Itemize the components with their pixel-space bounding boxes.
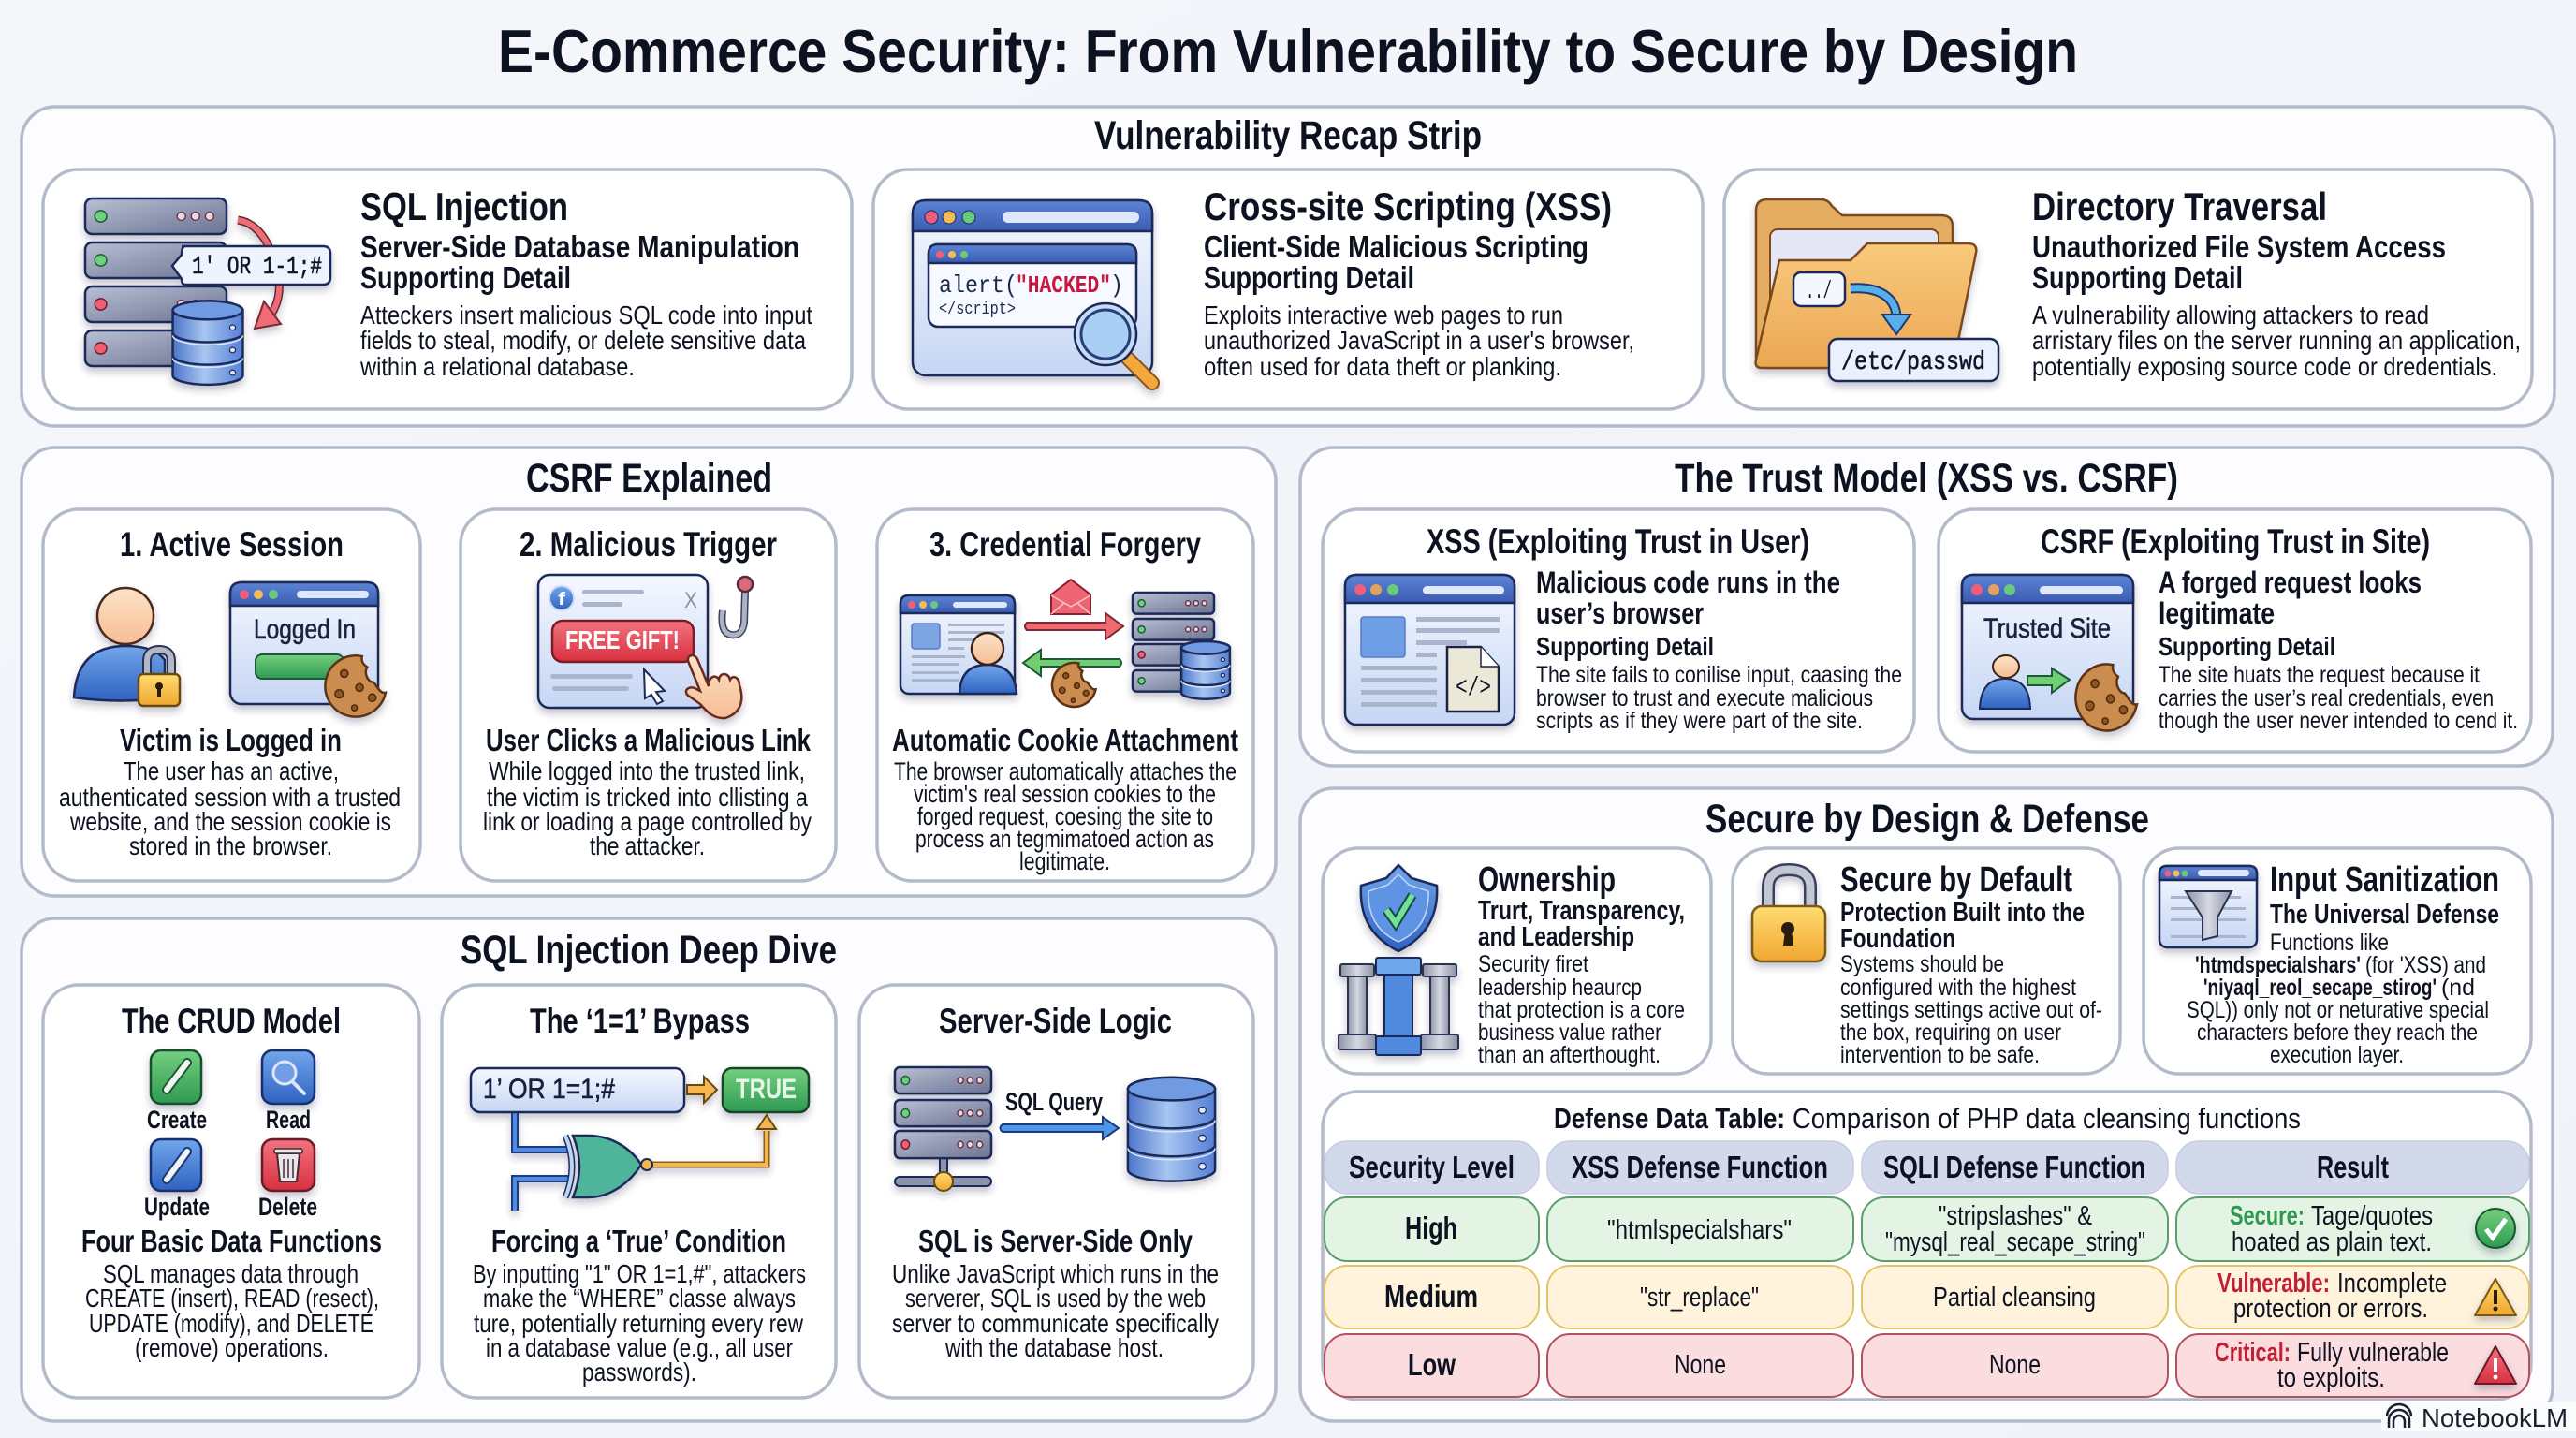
table row: high: "stripslashes" & — [1939, 1201, 2092, 1231]
icon: fishing hook — [722, 577, 753, 635]
panel: vulnerability recap strip — [22, 107, 2554, 426]
arrow: forged request with envelope — [1025, 580, 1123, 639]
text block: characters before they reach the — [2197, 1020, 2478, 1046]
label: update: Update — [144, 1193, 210, 1221]
text block — [1478, 860, 1685, 1068]
text block: Atteckers insert malicious SQL code into input — [360, 301, 812, 330]
table row: high: High — [1405, 1211, 1457, 1245]
text block: 'htmdspecialshars' — [2195, 952, 2361, 978]
heading: The ‘1=1’ Bypass — [530, 1002, 750, 1040]
heading: secure by design: Secure by Design & Defense — [1705, 797, 2149, 842]
subheading and description — [892, 1224, 1219, 1362]
arrow: SQL query: SQL Query — [1005, 1088, 1103, 1116]
arrow: returning cookie — [1023, 650, 1121, 707]
heading: trust model: The Trust Model (XSS vs. CSRF) — [1675, 456, 2178, 501]
icon: update — [151, 1139, 201, 1191]
text block — [1536, 565, 1902, 734]
table row: high — [1325, 1197, 2529, 1261]
text block: Directory Traversal — [2032, 184, 2327, 228]
table header row: Security Level — [1349, 1150, 1515, 1184]
icon: phishing popup with free gift button: X — [684, 588, 697, 613]
text block: configured with the highest — [1840, 975, 2076, 1001]
text block: SQL Injection — [360, 184, 568, 228]
table row: medium — [1325, 1266, 2529, 1328]
card: server-side logic — [859, 985, 1253, 1398]
table header row: SQLI Defense Function — [1883, 1150, 2145, 1184]
card: cross-site scripting — [873, 169, 1703, 409]
icon: browser alert with magnifier: alert( — [939, 271, 1017, 300]
text block: settings settings active out of- — [1840, 997, 2102, 1023]
icon: victim browser — [900, 595, 1017, 694]
heading: CSRF (Exploiting Trust in Site) — [2041, 522, 2430, 561]
label: delete: Delete — [258, 1193, 317, 1221]
subheading and description: (remove) operations. — [135, 1333, 329, 1362]
subheading and description: By inputting "1" OR 1=1,#", attackers — [473, 1259, 806, 1288]
subheading and description: in a database value (e.g., all user — [486, 1333, 793, 1362]
subheading and description: link or loading a page controlled by — [483, 807, 812, 836]
table row: medium: "str_replace" — [1640, 1283, 1759, 1313]
subheading and description: make the “WHERE” classe always — [483, 1284, 796, 1313]
text block: Systems should be — [1840, 951, 2004, 977]
icon: server stack with database and injected query: 1' OR 1-1;# — [192, 254, 322, 282]
icon: trusted site browser with cookie: Trusted Site — [1983, 613, 2111, 644]
heading: deep dive: SQL Injection Deep Dive — [461, 928, 837, 973]
subheading and description: ture, potentially returning every rew — [474, 1309, 804, 1338]
icon: padlock — [1752, 870, 1825, 961]
subheading and description: forged request, coesing the site to — [917, 802, 1213, 830]
subheading and description — [81, 1224, 382, 1362]
table row: low — [1325, 1334, 2529, 1397]
subheading and description — [473, 1224, 806, 1387]
text block: Malicious code runs in the — [1536, 565, 1840, 599]
text block: Supporting Detail — [1536, 632, 1714, 661]
icon: trusted site browser with cookie — [1962, 575, 2137, 730]
card: ownership — [1323, 848, 1711, 1074]
text block: carries the user’s real credentials, even — [2159, 685, 2494, 712]
text block: user’s browser — [1536, 596, 1704, 630]
text block: Functions like — [2270, 930, 2389, 956]
card: 1=1 bypass — [442, 985, 836, 1398]
subheading and description — [892, 723, 1238, 875]
table row: medium: Medium — [1384, 1279, 1478, 1313]
table row: medium: protection or errors. — [2233, 1294, 2428, 1324]
icon: networked server — [895, 1067, 991, 1191]
subheading and description: legitimate. — [1019, 847, 1110, 875]
icon: folder traversal — [1756, 199, 1998, 381]
heading: Server-Side Logic — [939, 1002, 1172, 1040]
table row: low: Fully vulnerable — [2297, 1338, 2449, 1368]
text block: within a relational database. — [359, 352, 635, 381]
subheading and description: The user has an active, — [124, 756, 339, 785]
icon: browser alert with magnifier: </script> — [939, 301, 1016, 319]
text block: (nd — [2441, 975, 2475, 1001]
text block: A forged request looks — [2159, 565, 2422, 599]
diagram: logic gate bypass: TRUE — [736, 1074, 797, 1105]
subheading and description: SQL manages data through — [103, 1259, 359, 1288]
subheading and description: the attacker. — [590, 831, 705, 860]
icon: delete — [262, 1139, 315, 1191]
card: XSS trust — [1323, 509, 1914, 752]
subheading and description: UPDATE (modify), and DELETE — [89, 1309, 373, 1338]
icon: green check — [2476, 1209, 2515, 1248]
text block: Protection Built into the — [1840, 898, 2085, 928]
table row: low: Low — [1408, 1347, 1456, 1382]
heading: 3. Credential Forgery — [929, 525, 1201, 564]
card: input sanitization — [2144, 848, 2531, 1074]
subheading and description: serverer, SQL is used by the web — [905, 1284, 1206, 1313]
text block: SQL)) only not or neturative special — [2187, 997, 2489, 1023]
text block: business value rather — [1478, 1020, 1661, 1046]
text block: Supporting Detail — [1204, 260, 1414, 295]
subheading and description: stored in the browser. — [129, 831, 332, 860]
text block: unauthorized JavaScript in a user's browser, — [1204, 326, 1634, 355]
table row: medium: Partial cleansing — [1933, 1283, 2096, 1313]
table row: low: None — [1989, 1350, 2041, 1380]
subheading and description: Forcing a ‘True’ Condition — [491, 1224, 786, 1258]
subheading and description: CREATE (insert), READ (resect), — [85, 1284, 379, 1313]
subheading and description: website, and the session cookie is — [69, 807, 391, 836]
text block: Trurt, Transparency, — [1478, 896, 1685, 926]
card: CRUD model — [43, 985, 419, 1398]
text block: execution layer. — [2270, 1042, 2404, 1068]
panel: SQL injection deep dive — [22, 918, 1276, 1421]
text block — [2159, 565, 2518, 734]
arrow: SQL query — [1000, 1088, 1119, 1139]
heading: The CRUD Model — [122, 1002, 341, 1040]
text block: and Leadership — [1478, 922, 1634, 952]
icon: browser alert with magnifier: "HACKED" — [1016, 271, 1111, 300]
watermark: NotebookLM: NotebookLM — [2422, 1403, 2568, 1432]
text block: Supporting Detail — [360, 260, 571, 295]
subheading and description: Unlike JavaScript which runs in the — [892, 1259, 1219, 1288]
icon: shield with check — [1361, 865, 1437, 951]
text block — [1840, 860, 2102, 1068]
card: directory traversal — [1724, 169, 2532, 409]
table row: high: "htmlspecialshars" — [1607, 1215, 1792, 1245]
text block: legitimate — [2159, 596, 2275, 630]
text block: Supporting Detail — [2159, 632, 2335, 661]
text block: that protection is a core — [1478, 997, 1685, 1023]
table title: Comparison of PHP data cleansing functions — [1793, 1102, 2301, 1135]
icon: browser with code document — [1345, 575, 1515, 725]
text block: (for 'XSS) and — [2365, 952, 2486, 978]
icon: phishing popup with free gift button — [538, 575, 741, 718]
text block: intervention to be safe. — [1840, 1042, 2040, 1068]
text block: Client-Side Malicious Scripting — [1204, 229, 1588, 264]
subheading and description: victim's real session cookies to the — [914, 780, 1216, 808]
icon: logged-in browser with cookie: Logged In — [254, 614, 356, 645]
table header row: Result — [2317, 1150, 2389, 1184]
text block: potentially exposing source code or dredentials. — [2032, 352, 2497, 381]
subheading and description: Automatic Cookie Attachment — [892, 723, 1238, 757]
card: defense data table — [1323, 1092, 2531, 1400]
table header row — [1325, 1141, 2529, 1194]
label: read: Read — [266, 1106, 311, 1134]
card: malicious trigger — [461, 509, 836, 881]
card: SQL injection — [43, 169, 852, 409]
text block: Secure by Default — [1840, 860, 2072, 900]
icon: warning triangle — [2475, 1279, 2516, 1315]
card: secure by default — [1733, 848, 2120, 1074]
icon: phishing popup with free gift button: f — [558, 590, 566, 609]
subheading and description: passwords). — [582, 1357, 696, 1387]
text block: than an afterthought. — [1478, 1042, 1661, 1068]
heading: recap strip: Vulnerability Recap Strip — [1094, 113, 1482, 158]
icon: pillars — [1339, 958, 1458, 1055]
subheading and description: authenticated session with a trusted — [59, 783, 401, 812]
text block: Server-Side Database Manipulation — [360, 229, 799, 264]
icon: danger triangle — [2475, 1346, 2516, 1384]
diagram: logic gate bypass: 1’ OR 1=1;# — [483, 1074, 615, 1105]
text block: Foundation — [1840, 924, 1955, 954]
table row: high: Secure: — [2230, 1201, 2305, 1231]
subheading and description: server to communicate specifically — [892, 1309, 1219, 1338]
card: credential forgery — [877, 509, 1253, 881]
icon: logged-in browser with cookie — [230, 582, 386, 717]
subheading and description — [483, 723, 812, 860]
icon: browser with funnel — [2159, 866, 2257, 947]
icon: user with padlock — [74, 588, 180, 706]
icon: folder traversal: ../ — [1806, 277, 1832, 305]
subheading and description — [59, 723, 401, 860]
text block: fields to steal, modify, or delete sensitive data — [360, 326, 806, 355]
text block: the box, requiring on user — [1840, 1020, 2061, 1046]
icon: folder traversal: /etc/passwd — [1841, 348, 1985, 377]
heading: 1. Active Session — [120, 525, 344, 564]
icon: server and database — [1133, 593, 1230, 699]
table row: medium: Incomplete — [2337, 1269, 2447, 1299]
icon: server stack with database and injected query — [85, 198, 330, 385]
text block: Exploits interactive web pages to run — [1204, 301, 1563, 330]
text block: The Universal Defense — [2270, 900, 2499, 930]
table row: high: Tage/quotes — [2311, 1201, 2433, 1231]
title: E-Commerce Security: From Vulnerability to Secure by Design — [498, 17, 2078, 85]
table row: low: None — [1675, 1350, 1726, 1380]
text block: scripts as if they were part of the site. — [1536, 708, 1863, 734]
text block — [359, 184, 812, 381]
subheading and description: User Clicks a Malicious Link — [486, 723, 812, 757]
text block: Input Sanitization — [2270, 860, 2499, 900]
icon: browser alert with magnifier — [913, 200, 1152, 383]
text block — [1204, 184, 1634, 381]
table row: low: to exploits. — [2277, 1363, 2385, 1393]
table row: low: Critical: — [2215, 1338, 2291, 1368]
subheading and description: with the database host. — [944, 1333, 1164, 1362]
text block: Cross-site Scripting (XSS) — [1204, 184, 1612, 228]
table title: Defense Data Table: — [1554, 1102, 1785, 1135]
subheading and description: Four Basic Data Functions — [81, 1224, 382, 1258]
subheading and description: The browser automatically attaches the — [894, 757, 1237, 785]
panel: the trust model — [1300, 448, 2553, 766]
icon: create — [151, 1050, 201, 1104]
text block: browser to trust and execute malicious — [1536, 685, 1873, 712]
text block: 'niyaql_reol_secape_stirog' — [2203, 975, 2437, 1001]
table title — [1554, 1102, 2301, 1135]
panel: secure by design and defense — [1300, 788, 2553, 1421]
text block: Supporting Detail — [2032, 260, 2243, 295]
subheading and description: Victim is Logged in — [120, 723, 342, 757]
label: create: Create — [147, 1106, 207, 1134]
text block: A vulnerability allowing attackers to read — [2032, 301, 2429, 330]
text block: The site huats the request because it — [2159, 662, 2480, 688]
subheading and description: process an tegmimatoed action as — [915, 825, 1214, 853]
text block: Ownership — [1478, 860, 1616, 900]
panel: CSRF explained — [22, 448, 1276, 896]
table row: high: "mysql_real_secape_string" — [1885, 1227, 2145, 1257]
card: CSRF trust — [1939, 509, 2531, 752]
icon: browser alert with magnifier: ) — [1110, 271, 1123, 300]
icon: read — [262, 1050, 315, 1104]
text block: Security firet — [1478, 951, 1588, 977]
subheading and description: SQL is Server-Side Only — [918, 1224, 1193, 1258]
subheading and description: While logged into the trusted link, — [489, 756, 805, 785]
heading: 2. Malicious Trigger — [520, 525, 777, 564]
text block: The site fails to conilise input, caasing the — [1536, 662, 1902, 688]
icon: browser with code document: </> — [1456, 674, 1491, 703]
text block — [2187, 860, 2499, 1068]
table row: high: hoated as plain text. — [2232, 1227, 2432, 1257]
text block: Unauthorized File System Access — [2032, 229, 2446, 264]
heading: XSS (Exploiting Trust in User) — [1427, 522, 1809, 561]
icon: database — [1128, 1078, 1215, 1181]
subheading and description: the victim is tricked into cllisting a — [487, 783, 808, 812]
table row: medium: Vulnerable: — [2217, 1269, 2330, 1299]
text block: leadership heaurcp — [1478, 975, 1642, 1001]
card: active session — [43, 509, 420, 881]
icon: phishing popup with free gift button: FREE GIFT! — [565, 625, 680, 654]
table header row: XSS Defense Function — [1572, 1150, 1828, 1184]
heading: CSRF explained: CSRF Explained — [526, 456, 772, 501]
text block: often used for data theft or planking. — [1204, 352, 1561, 381]
text block — [2032, 184, 2521, 381]
diagram: logic gate bypass — [471, 1068, 809, 1211]
